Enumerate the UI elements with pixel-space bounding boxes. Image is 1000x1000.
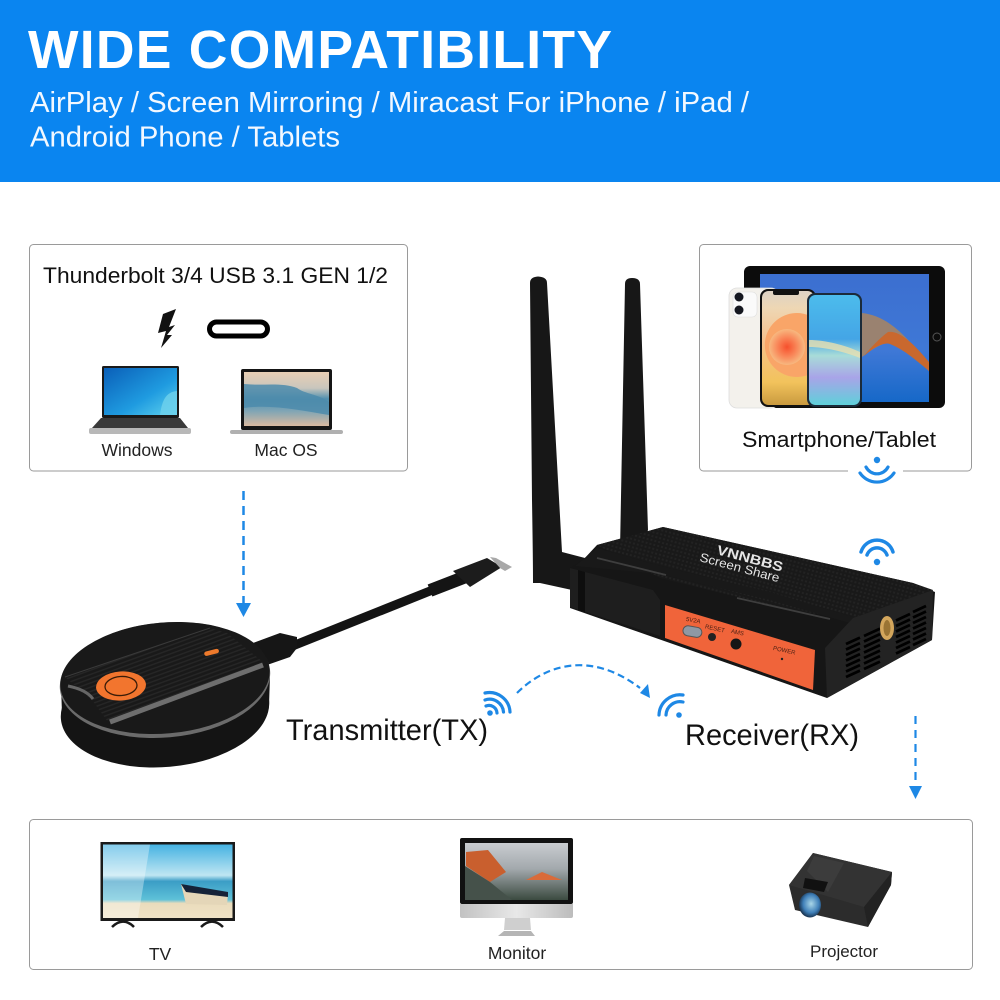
icon: arrow from receiver to displays — [909, 716, 922, 799]
receiver top face — [597, 527, 933, 618]
icon: monitor — [460, 838, 573, 936]
panel: mobile devices — [700, 244, 972, 482]
label: receiver: Receiver(RX) — [685, 719, 859, 752]
panel heading: Thunderbolt 3/4 USB 3.1 GEN 1/2 — [43, 263, 388, 288]
icon: wifi above receiver — [861, 540, 893, 565]
icon: white phone — [729, 288, 779, 408]
receiver device — [530, 276, 935, 698]
receiver left block — [570, 568, 660, 636]
icon: wifi receiver — [659, 695, 683, 718]
receiver brand text: VNNBBS — [715, 542, 785, 574]
icon: wifi transmitter — [485, 693, 510, 716]
icon: tablet — [744, 266, 945, 408]
receiver brand text — [698, 542, 785, 585]
label: mac os: Mac OS — [254, 440, 318, 460]
transmitter device — [55, 557, 512, 776]
header banner — [0, 0, 1000, 182]
icon: wifi below panel — [860, 457, 894, 482]
subtitle: Android Phone / Tablets — [30, 122, 340, 154]
icon: windows laptop — [89, 366, 191, 434]
usb-c cable — [253, 557, 512, 665]
icon: orange phone — [760, 289, 816, 407]
subtitle — [30, 87, 750, 154]
receiver orange panel — [665, 605, 815, 690]
antennas — [530, 276, 648, 590]
label: monitor: Monitor — [488, 943, 546, 963]
receiver body — [570, 527, 935, 698]
label: projector: Projector — [810, 942, 878, 961]
receiver orange panel: POWER — [772, 646, 796, 657]
icon: blue phone — [807, 293, 862, 407]
panel label: Smartphone/Tablet — [742, 427, 936, 452]
icon: mac laptop — [230, 369, 343, 434]
receiver brand text: Screen Share — [698, 550, 781, 585]
transmitter puck — [55, 614, 275, 776]
receiver orange panel: 5V2A — [685, 617, 701, 625]
icon: tv — [100, 842, 235, 927]
receiver vented side — [825, 590, 933, 698]
label: transmitter: Transmitter(TX) — [286, 714, 488, 747]
icon: projector — [789, 853, 892, 927]
panel: computer sources — [30, 244, 408, 471]
icon: usb-c port — [210, 322, 268, 336]
receiver orange panel: RESET — [704, 624, 725, 634]
icon: thunderbolt — [158, 309, 176, 348]
title: WIDE COMPATIBILITY — [28, 21, 612, 80]
icon: arrow from computers to transmitter — [236, 491, 251, 617]
panel: display outputs — [30, 820, 972, 970]
subtitle: AirPlay / Screen Mirroring / Miracast For iPhone / iPad / — [30, 87, 750, 119]
arrow: wireless link — [517, 665, 650, 698]
label: tv: TV — [149, 944, 172, 964]
receiver orange panel: AMS — [730, 629, 744, 638]
label: windows: Windows — [102, 440, 173, 460]
